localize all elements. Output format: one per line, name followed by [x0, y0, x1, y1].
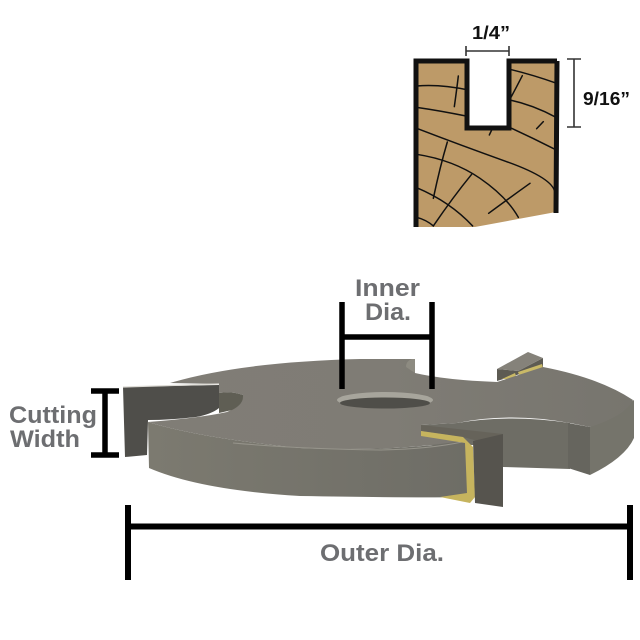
label: Cutting: Cutting: [9, 402, 97, 429]
wood outline: [416, 61, 557, 227]
bracket: [91, 391, 119, 455]
label: Width: Width: [10, 426, 80, 453]
dimension: outer diameter: [128, 505, 630, 580]
left tooth highlight: [123, 384, 219, 387]
dimension line: [567, 59, 581, 127]
notch corner wall: [568, 423, 590, 475]
diagram: wood cross-section with groove: [416, 61, 557, 227]
dimension: groove depth 9/16 inch: [567, 59, 630, 127]
hole rim: [337, 392, 433, 408]
slot cutter bit: [123, 352, 634, 507]
label: 1/4”: [472, 23, 510, 43]
left carbide tooth: [123, 385, 219, 457]
wood block fill: [416, 61, 557, 227]
label: 9/16”: [583, 89, 630, 109]
notch side wall: [421, 418, 570, 469]
bracket: [128, 505, 630, 580]
back tooth top: [497, 352, 543, 371]
top face edge highlight: [233, 442, 462, 450]
label: Inner: Inner: [355, 275, 420, 302]
disc top face: [148, 359, 633, 449]
label: Dia.: Dia.: [365, 299, 411, 326]
left tooth gullet: [219, 392, 243, 413]
dimension: groove width 1/4 inch: [466, 23, 510, 56]
back tooth brazing: [502, 364, 543, 379]
hole interior: [340, 398, 430, 408]
front tooth face: [473, 434, 503, 507]
arbor hole: [337, 392, 433, 408]
bracket: [342, 302, 432, 389]
label: Outer Dia.: [320, 540, 444, 567]
front tooth gold brazing: [421, 431, 475, 503]
dimension line: [466, 46, 509, 56]
right side wall: [590, 400, 634, 475]
dimension: cutting width: [9, 391, 119, 455]
front tooth top: [421, 425, 503, 441]
wood grain lines: [417, 69, 557, 226]
top face notch shadow: [406, 359, 415, 373]
main side wall: [148, 422, 470, 497]
back tooth front face: [497, 358, 543, 381]
dimension: inner diameter: [342, 275, 432, 389]
